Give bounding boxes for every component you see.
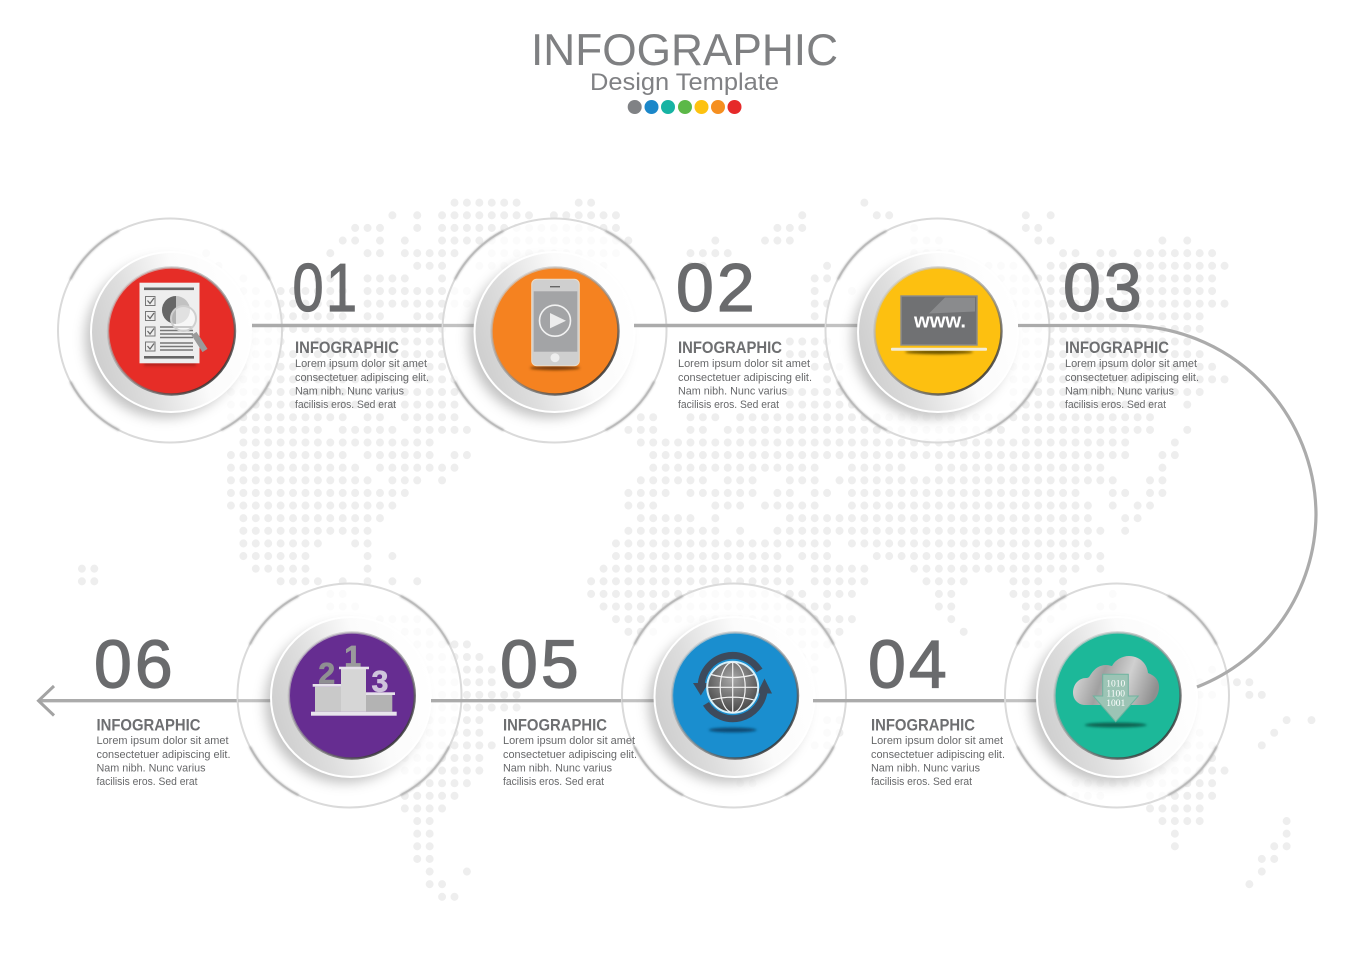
text block 06: INFOGRAPHIC	[96, 716, 201, 734]
panel: step 02	[404, 180, 812, 481]
dotted world map	[82, 203, 1312, 897]
icon: cloud download: 1100	[1106, 690, 1125, 700]
text block 05: INFOGRAPHIC	[503, 716, 607, 734]
number 03: 03	[1063, 250, 1145, 326]
icon: laptop with www	[891, 296, 987, 354]
icon: smartphone with play button	[530, 279, 580, 370]
text block 06: consectetuer adipiscing elit.	[96, 749, 230, 761]
panel: step 05	[500, 545, 885, 846]
text block 06: facilisis eros. Sed erat	[96, 776, 198, 788]
text block 02: facilisis eros. Sed erat	[678, 399, 780, 411]
text block 05: Nam nibh. Nunc varius	[503, 762, 612, 774]
number 05: 05	[500, 627, 582, 703]
text block 02: Lorem ipsum dolor sit amet	[678, 358, 811, 370]
text block 01: consectetuer adipiscing elit.	[295, 372, 429, 384]
icon: laptop with www: www.	[913, 311, 966, 333]
connector 02 to 03	[634, 324, 858, 327]
heading: INFOGRAPHIC: INFOGRAPHIC	[531, 26, 838, 75]
title	[531, 26, 838, 114]
icon: globe with circular arrows	[693, 655, 772, 732]
text block 01: INFOGRAPHIC	[295, 339, 399, 357]
text block 03: Nam nibh. Nunc varius	[1065, 386, 1174, 398]
text block 02	[678, 339, 812, 411]
icon: cloud download	[1073, 656, 1159, 727]
colour dots	[628, 100, 742, 114]
text block 03	[1065, 339, 1199, 411]
panel: step 03	[787, 180, 1199, 481]
text block 03: consectetuer adipiscing elit.	[1065, 372, 1199, 384]
connector 05 to 06	[431, 699, 655, 702]
text block 04: INFOGRAPHIC	[871, 716, 975, 734]
text block 04: Nam nibh. Nunc varius	[871, 762, 980, 774]
number 06: 06	[94, 627, 176, 703]
number 04: 04	[868, 627, 950, 703]
text block 05: facilisis eros. Sed erat	[503, 776, 605, 788]
text block 04: consectetuer adipiscing elit.	[871, 749, 1005, 761]
icon: winners podium: 2	[318, 657, 335, 690]
icon: checklist with magnifier	[140, 283, 205, 366]
text block 06	[96, 716, 230, 788]
panel: step 04	[868, 545, 1268, 846]
text block 02: INFOGRAPHIC	[678, 339, 782, 357]
text block 03: Lorem ipsum dolor sit amet	[1065, 358, 1198, 370]
icon: winners podium: 3	[372, 666, 388, 699]
text block 06: Nam nibh. Nunc varius	[96, 762, 206, 774]
icon: winners podium	[311, 641, 397, 716]
text block 01	[295, 339, 429, 411]
number 02: 02	[676, 250, 758, 326]
text block 03: INFOGRAPHIC	[1065, 339, 1169, 357]
text block 02: consectetuer adipiscing elit.	[678, 372, 812, 384]
text block 02: Nam nibh. Nunc varius	[678, 386, 787, 398]
text block 05	[503, 716, 637, 788]
text block 04: facilisis eros. Sed erat	[871, 776, 973, 788]
connector 04 to 05	[813, 699, 1037, 702]
curved connector 03 to 04	[1018, 326, 1316, 687]
icon: cloud download: 1010	[1106, 680, 1125, 690]
icon: cloud download: 1001	[1106, 699, 1125, 709]
panel: step 01	[19, 180, 429, 481]
panel: step 06	[94, 545, 500, 846]
text block 01: facilisis eros. Sed erat	[295, 399, 397, 411]
text block 05: consectetuer adipiscing elit.	[503, 749, 637, 761]
icon: winners podium: 1	[344, 641, 361, 674]
text block 01: Lorem ipsum dolor sit amet	[295, 358, 428, 370]
text block 04: Lorem ipsum dolor sit amet	[871, 735, 1004, 747]
text block 05: Lorem ipsum dolor sit amet	[503, 735, 636, 747]
text block 04	[871, 716, 1005, 788]
number 01: 01	[292, 250, 360, 326]
arrow line to the left end	[38, 686, 272, 716]
subheading: Design Template: Design Template	[590, 69, 779, 96]
text block 03: facilisis eros. Sed erat	[1065, 399, 1167, 411]
text block 01: Nam nibh. Nunc varius	[295, 386, 404, 398]
text block 06: Lorem ipsum dolor sit amet	[96, 735, 229, 747]
connector 01 to 02	[252, 324, 475, 327]
